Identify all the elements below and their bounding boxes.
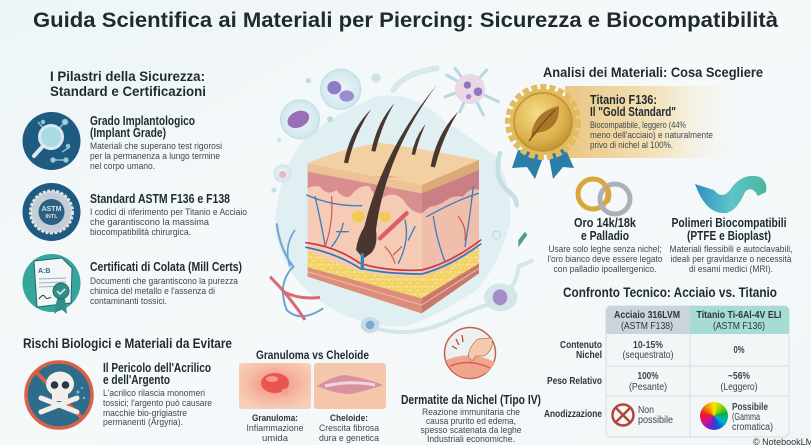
row: nickel content: 10-15% bbox=[633, 340, 663, 351]
text: titanium: Titanio F136: bbox=[590, 93, 657, 107]
text: acrylic and silver: macchie bio-grigiastre bbox=[103, 408, 187, 418]
text: implant grade: per la permanenza a lungo termine bbox=[90, 151, 220, 161]
text: implant grade: (Implant Grade) bbox=[90, 126, 166, 140]
text: ASTM standard: Standard ASTM F136 e F138 bbox=[90, 192, 230, 206]
text: polymers: Polimeri Biocompatibili bbox=[672, 216, 786, 230]
text: gold and palladium: Usare solo leghe senza nichel; bbox=[548, 244, 662, 254]
text: gold and palladium bbox=[548, 216, 662, 274]
text: gold and palladium: e Palladio bbox=[581, 229, 629, 243]
panel: biological risks bbox=[23, 328, 541, 444]
text: granuloma: Granuloma: bbox=[252, 413, 298, 424]
text: acrylic and silver: L'acrilico rilascia monomeri bbox=[103, 388, 205, 398]
row labels: Peso Relativo bbox=[547, 376, 602, 387]
row: nickel content: (sequestrato) bbox=[622, 350, 674, 361]
text: possible bbox=[732, 402, 773, 433]
text: polymers bbox=[670, 216, 792, 274]
illustration: skin cross-section bbox=[270, 68, 533, 333]
text: polymers: (PTFE e Bioplast) bbox=[687, 229, 771, 243]
heading: comparison: Confronto Tecnico: Acciaio vs. Titanio bbox=[563, 285, 777, 300]
text: possible: cromatica) bbox=[732, 422, 773, 433]
skin block bbox=[308, 143, 479, 313]
table header: (ASTM F136) bbox=[713, 321, 765, 332]
text: mill certs: chimica del metallo e l'assenza di bbox=[90, 286, 215, 296]
text: ASTM standard bbox=[90, 192, 247, 237]
hairs bbox=[344, 85, 458, 270]
text: mill certs: Documenti che garantiscono la purezza bbox=[90, 276, 238, 286]
cells and vessels around the skin bbox=[270, 68, 533, 333]
text: mill certs: contaminanti tossici. bbox=[90, 296, 167, 306]
heading: risks: Rischi Biologici e Materiali da Evitare bbox=[23, 336, 232, 351]
icon: ASTM seal: ASTM bbox=[42, 206, 62, 213]
table header: Titanio Ti-6Al-4V ELI bbox=[696, 310, 782, 321]
text: acrylic and silver bbox=[103, 361, 212, 427]
heading: pillars: Standard e Certificazioni bbox=[50, 83, 206, 99]
table header: (ASTM F138) bbox=[621, 321, 673, 332]
text: polymers: di esami medici (MRI). bbox=[689, 264, 773, 274]
text: implant grade: Materiali che superano test rigorosi bbox=[90, 141, 222, 151]
heading: materials: Analisi dei Materiali: Cosa Scegliere bbox=[543, 65, 763, 80]
icon: gold and palladium rings bbox=[578, 179, 630, 214]
heading: pillars: I Pilastri della Sicurezza: bbox=[50, 68, 205, 84]
row labels bbox=[544, 340, 602, 420]
title: Guida Scientifica ai Materiali per Piercing: Sicurezza e Biocompatibilità bbox=[33, 8, 779, 32]
text: granuloma: umida bbox=[262, 433, 289, 444]
heading: granuloma vs keloid: Granuloma vs Cheloide bbox=[256, 348, 369, 362]
text: acrylic and silver: e dell'Argento bbox=[103, 373, 170, 387]
row: nickel content: 0% bbox=[734, 345, 745, 356]
text: acrylic and silver: Il Pericolo dell'Acrilico bbox=[103, 361, 211, 375]
text: granuloma: Infiammazione bbox=[246, 423, 304, 434]
text: polymers: ideali per gravidanze o necessità bbox=[670, 254, 792, 264]
text: possible: Possibile bbox=[732, 402, 768, 413]
row: nickel content bbox=[622, 340, 745, 361]
icon: mill certificate bbox=[22, 254, 80, 314]
row: relative weight bbox=[629, 371, 758, 393]
icon: polymer ribbon bbox=[695, 176, 766, 213]
row: relative weight: (Pesante) bbox=[629, 382, 667, 393]
text: ASTM standard: che garantiscono la massima bbox=[90, 217, 209, 227]
image: granuloma bbox=[239, 363, 311, 409]
text: keloid: Cheloide: bbox=[330, 413, 368, 424]
text: keloid: Crescita fibrosa bbox=[319, 423, 380, 434]
text: not possible: possibile bbox=[638, 415, 673, 426]
panel: technical comparison bbox=[544, 285, 789, 437]
text: keloid bbox=[319, 413, 380, 444]
text: not possible: Non bbox=[638, 405, 654, 416]
icon: mill certificate: A:B bbox=[38, 268, 50, 275]
row: relative weight: ~56% bbox=[728, 371, 750, 382]
row labels: Nichel bbox=[576, 350, 602, 361]
panel: materials analysis bbox=[508, 65, 792, 274]
row: relative weight: (Leggero) bbox=[720, 382, 758, 393]
icon: ASTM seal: INTL bbox=[45, 214, 58, 220]
heading: pillars bbox=[50, 68, 206, 99]
icon: not possible bbox=[612, 404, 634, 426]
text: mill certs bbox=[90, 260, 242, 306]
text: ASTM standard: biocompatibilità chirurgica. bbox=[90, 227, 191, 237]
background fluid blob bbox=[275, 95, 511, 327]
text: polymers: Materiali flessibili e autoclavabili, bbox=[670, 244, 792, 254]
text: nickel dermatitis: spesso scatenata da leghe bbox=[420, 425, 522, 435]
row: relative weight: 100% bbox=[638, 371, 659, 382]
text: possible: (Gamma bbox=[732, 412, 760, 423]
text: acrylic and silver: permanenti (Argyria). bbox=[103, 417, 183, 427]
row labels: Contenuto bbox=[560, 340, 602, 351]
text: granuloma bbox=[246, 413, 304, 444]
icon: color wheel bbox=[700, 402, 728, 430]
vessels in the dermis bbox=[306, 187, 481, 274]
panel: pillars of safety bbox=[22, 68, 247, 314]
row labels: Anodizzazione bbox=[544, 409, 602, 420]
icon: magnifier on molecule bbox=[22, 112, 80, 170]
text: gold and palladium: Oro 14k/18k bbox=[574, 216, 636, 230]
table header: Acciaio 316LVM bbox=[614, 310, 680, 321]
table header bbox=[614, 310, 782, 332]
text: mill certs: Certificati di Colata (Mill Certs) bbox=[90, 260, 242, 274]
image: keloid bbox=[314, 363, 386, 409]
text: implant grade: Grado Implantologico bbox=[90, 114, 195, 128]
text: titanium: Biocompatibile, leggero (44% bbox=[590, 120, 686, 130]
text: ASTM standard: I codici di riferimento per Titanio e Acciaio bbox=[90, 207, 247, 217]
icon: gold medal bbox=[508, 87, 578, 179]
text: keloid: dura e genetica bbox=[319, 433, 380, 444]
icon: dermatitis bbox=[444, 328, 496, 378]
text: implant grade: nel corpo umano. bbox=[90, 161, 155, 171]
text: titanium: privo di nichel al 100%. bbox=[590, 140, 673, 150]
text: gold and palladium: l'oro bianco deve essere legato bbox=[548, 254, 662, 264]
text: titanium: meno dell'acciaio) e naturalmente bbox=[590, 130, 713, 140]
text: gold and palladium: con palladio ipoallergenico. bbox=[554, 264, 656, 274]
titanium highlight band bbox=[565, 86, 740, 158]
text: nickel dermatitis: Industriali economiche. bbox=[427, 434, 515, 444]
text: implant grade bbox=[90, 114, 222, 171]
text: nickel dermatitis: Reazione immunitaria che bbox=[422, 407, 520, 417]
text: titanium bbox=[590, 93, 713, 150]
text: not possible bbox=[638, 405, 673, 426]
icon: ASTM seal bbox=[22, 183, 80, 241]
icon: skull prohibited bbox=[26, 362, 92, 428]
text: titanium: Il "Gold Standard" bbox=[590, 105, 676, 119]
text: acrylic and silver: tossici; l'argento può causare bbox=[103, 398, 212, 408]
text: nickel dermatitis: Dermatite da Nichel (Tipo IV) bbox=[401, 393, 541, 407]
table bbox=[544, 306, 789, 437]
text: nickel dermatitis bbox=[401, 393, 541, 444]
text: nickel dermatitis: causa prurito ed edema, bbox=[426, 416, 516, 426]
